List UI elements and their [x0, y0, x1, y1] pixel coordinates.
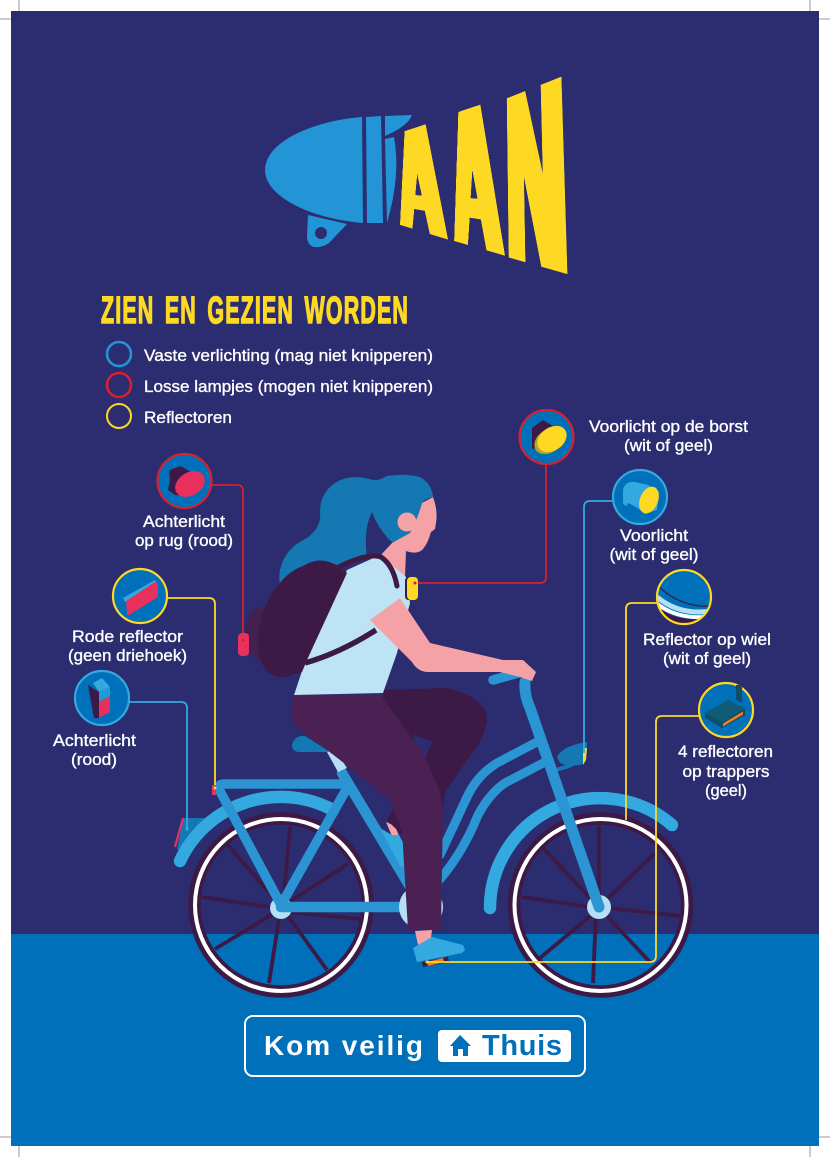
legend: loose lamps	[107, 373, 433, 397]
neck and face	[380, 497, 437, 577]
callout: rear light on back: op rug (rood)	[135, 531, 233, 550]
callout: front light on chest: (wit of geel)	[624, 436, 713, 455]
legend: loose lamps: Losse lampjes (mogen niet knipperen)	[144, 377, 433, 396]
legend: reflectors: Reflectoren	[144, 408, 232, 427]
saddle	[292, 736, 330, 752]
legend: fixed lighting: Vaste verlichting (mag niet knipperen)	[144, 346, 433, 365]
logo: Kom veilig Thuis: Thuis	[482, 1030, 562, 1062]
legend: fixed lighting	[107, 342, 433, 366]
light trouser leg	[291, 695, 443, 930]
ground band	[11, 934, 819, 1146]
seat post	[327, 750, 347, 772]
gap between legs	[413, 735, 432, 760]
callout: rear light: Achterlicht	[53, 731, 136, 750]
callout: front light on chest	[405, 410, 748, 600]
title: AAN: A	[438, 25, 503, 290]
callout: front light: Voorlicht	[620, 526, 688, 545]
front wheel	[514, 818, 687, 992]
callout: wheel reflector: (wit of geel)	[663, 649, 751, 668]
callout: rear light on back	[135, 454, 249, 656]
callout: front light	[584, 470, 698, 753]
callout: rear light	[53, 671, 188, 830]
callout: wheel reflector: Reflector op wiel	[643, 630, 771, 649]
callout: red reflector: Rode reflector	[72, 627, 183, 646]
title: AAN: A	[386, 57, 450, 264]
heading: ZIEN EN GEZIEN WORDEN	[101, 290, 409, 332]
hair	[279, 475, 433, 590]
legend: reflectors	[107, 404, 232, 428]
callout: front light: (wit of geel)	[610, 545, 698, 564]
rear light mount	[175, 818, 208, 850]
front lamp	[556, 742, 587, 770]
callout: pedal reflectors: (geel)	[705, 781, 747, 800]
callout: wheel reflector	[626, 570, 771, 820]
callout: pedal reflectors: op trappers	[682, 762, 770, 781]
title: AAN	[386, 20, 571, 344]
bottom bracket	[399, 885, 443, 929]
callout: red reflector	[68, 569, 216, 795]
frame	[219, 672, 599, 907]
callout: pedal reflectors: 4 reflectoren	[678, 742, 773, 761]
rear mudguard	[180, 797, 333, 861]
callout: pedal reflectors	[426, 683, 773, 964]
callout: front light on chest: Voorlicht op de borst	[589, 417, 748, 436]
icon: bicycle headlight logo	[265, 115, 412, 247]
legend	[107, 342, 433, 428]
far leg and shoe	[380, 822, 407, 867]
icon: house	[450, 1035, 471, 1056]
logo: Kom veilig Thuis: Kom veilig	[264, 1030, 423, 1061]
rear wheel	[194, 818, 368, 992]
illustration: cyclist	[245, 475, 536, 967]
dark trouser leg	[383, 688, 487, 838]
shirt	[294, 555, 410, 695]
back lamp pouch	[245, 607, 279, 661]
arm	[370, 598, 536, 681]
front mudguard	[490, 798, 672, 908]
illustration: bicycle	[175, 672, 687, 992]
front foot	[413, 930, 465, 967]
callout: rear light: (rood)	[71, 750, 117, 769]
title: AAN: N	[505, 20, 571, 344]
callout: red reflector: (geen driehoek)	[68, 646, 187, 665]
callout: rear light on back: Achterlicht	[143, 512, 225, 531]
logo: Kom veilig Thuis	[245, 1016, 585, 1076]
backpack	[258, 556, 397, 677]
